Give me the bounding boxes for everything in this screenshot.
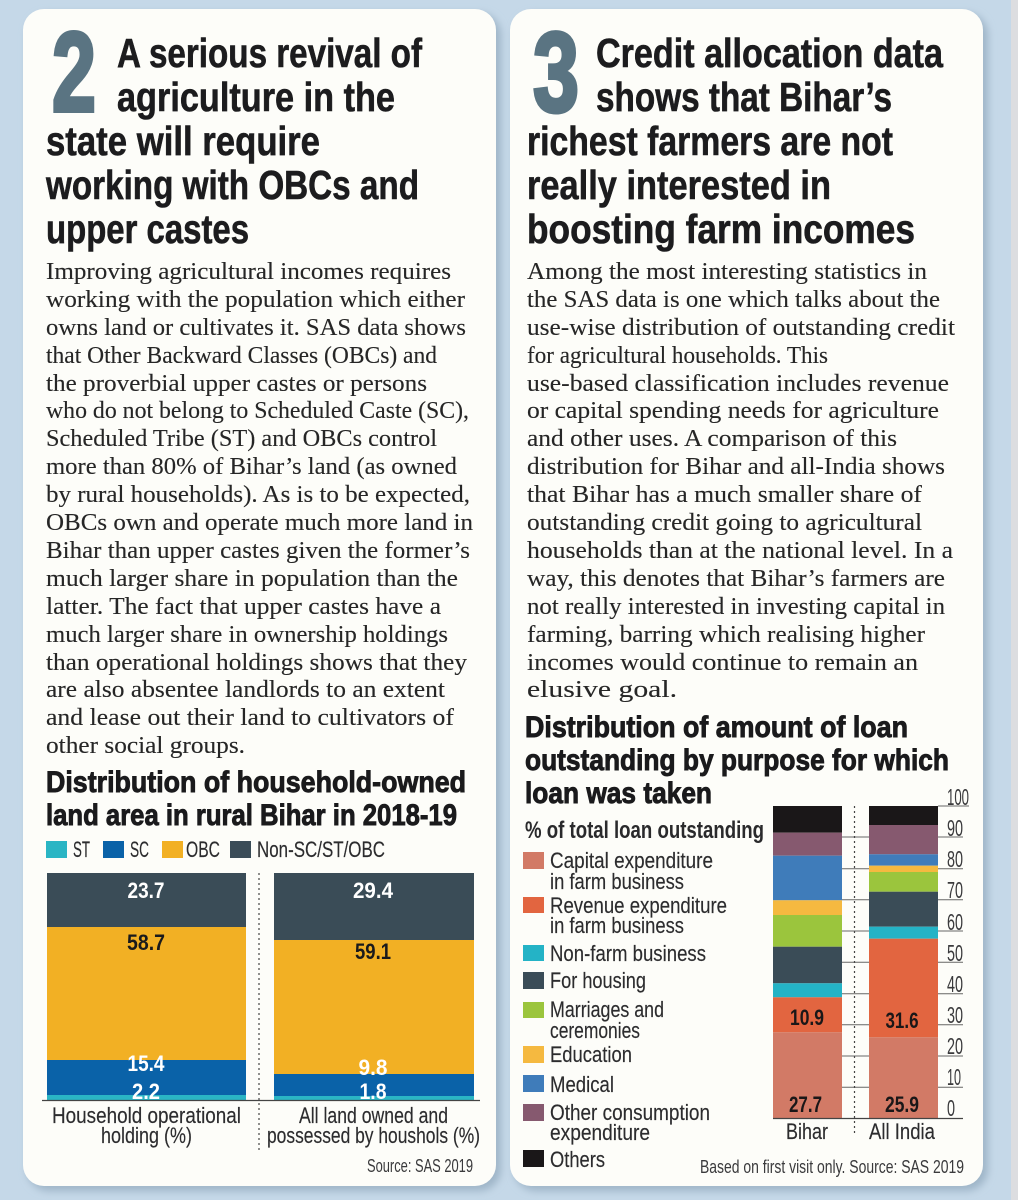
gridlines and axis ticks (842, 806, 969, 1087)
heading: left panel: state will require (46, 118, 320, 164)
source note: left panel: Source: SAS 2019 (367, 1156, 473, 1176)
legend: loan chart: Revenue expenditure (550, 893, 727, 918)
body text: left panel: by rural households). As is to be expected, (46, 482, 470, 508)
bar: household operational holding: 15.4 (128, 1051, 165, 1076)
body text: right panel: distribution for Bihar and all-India shows (527, 454, 945, 480)
legend: loan chart (523, 848, 727, 1172)
legend: loan chart: ceremonies (550, 1018, 640, 1043)
y axis labels: 90 (947, 815, 963, 841)
bar: All India: 31.6 (886, 1008, 918, 1033)
body text: right panel: incomes would continue to remain an (527, 650, 918, 676)
chart title: loan outstanding: outstanding by purpose for which (525, 744, 949, 777)
big numeral 3: 3 (533, 9, 579, 135)
bar: household operational holding: 23.7 (128, 878, 164, 903)
body text: right panel: use-based classification includes revenue (527, 371, 949, 397)
stacked bar chart: land distribution (42, 873, 480, 1150)
chart title: household-owned land: Distribution of household-owned (46, 766, 466, 799)
bar: household operational holding: 58.7 (127, 930, 165, 955)
y axis labels: 100 (947, 784, 969, 810)
body text: left panel: the proverbial upper castes or persons (46, 371, 427, 397)
heading: right panel: shows that Bihar’s (596, 74, 892, 120)
stacked bar chart: loan purpose (773, 784, 969, 1144)
heading: right panel: richest farmers are not (527, 118, 893, 164)
bar: Bihar: 10.9 (790, 1005, 824, 1030)
body text: right panel: use-wise distribution of outstanding credit (527, 315, 955, 341)
bar: all land owned: 59.1 (355, 939, 391, 964)
heading: right panel (527, 30, 944, 252)
body text: left panel: owns land or cultivates it. SAS data shows (46, 315, 466, 341)
body text: left panel: Bihar than upper castes given the former’s (46, 538, 470, 564)
body text: right panel: farming, barring which realising higher (527, 622, 925, 648)
y axis labels: 40 (947, 971, 963, 997)
bar: all land owned: 9.8 (358, 1055, 388, 1080)
body text: right panel: the SAS data is one which talks about the (527, 287, 940, 313)
y axis labels: 10 (947, 1064, 961, 1090)
bar: Bihar: 27.7 (789, 1092, 822, 1117)
body text: left panel: working with the population which either (46, 287, 465, 313)
y axis labels (947, 784, 969, 1121)
axis labels: Household operational (52, 1103, 241, 1128)
x axis labels: All India (869, 1119, 936, 1144)
chart title: household-owned land: land area in rural Bihar in 2018-19 (46, 799, 457, 832)
y axis labels: 70 (947, 877, 963, 903)
legend: loan chart: Medical (550, 1072, 614, 1097)
body text: left panel: than operational holdings shows that they (46, 650, 467, 676)
y axis labels: 80 (947, 846, 963, 872)
axis labels: holding (%) (101, 1123, 192, 1148)
body text: left panel: much larger share in ownership holdings (46, 622, 448, 648)
body text: left panel: more than 80% of Bihar’s land (as owned (46, 454, 457, 480)
legend: land chart (46, 837, 385, 862)
body text: right panel: and other uses. A comparison of this (527, 426, 897, 452)
body text: left panel (46, 259, 473, 759)
heading: left panel: A serious revival of (117, 30, 422, 76)
legend: land chart: ST (73, 837, 90, 862)
legend: loan chart: in farm business (550, 913, 684, 938)
legend: loan chart: Non-farm business (550, 941, 706, 966)
legend: loan chart: For housing (550, 968, 646, 993)
bar: all land owned: 29.4 (353, 878, 394, 903)
legend: land chart: Non-SC/ST/OBC (257, 837, 385, 862)
bar: All India: 25.9 (885, 1092, 919, 1117)
body text: right panel: outstanding credit going to agricultural (527, 510, 922, 536)
chart title: household-owned land (46, 766, 466, 832)
axis labels (52, 1103, 480, 1148)
chart title: loan outstanding: loan was taken (525, 777, 712, 810)
legend: loan chart: expenditure (550, 1120, 650, 1145)
heading: left panel: agriculture in the (117, 74, 395, 120)
axis labels: possessed by houshols (%) (267, 1123, 480, 1148)
body text: right panel: for agricultural households. This (527, 343, 828, 369)
y axis labels: 60 (947, 909, 963, 935)
heading: right panel: Credit allocation data (596, 30, 944, 76)
bar: All India (869, 806, 938, 1118)
panel: left, revival of agriculture (23, 9, 501, 1191)
body text: left panel: who do not belong to Scheduled Caste (SC), (46, 398, 469, 424)
heading: right panel: really interested in (527, 162, 831, 208)
legend: loan chart: Others (550, 1147, 605, 1172)
body text: right panel (527, 259, 955, 703)
y axis labels: 50 (947, 940, 963, 966)
heading: left panel (45, 30, 422, 252)
body text: left panel: much larger share in population than the (46, 566, 458, 592)
chart title: loan outstanding (525, 711, 949, 810)
body text: right panel: way, this denotes that Bihar’s farmers are (527, 566, 945, 592)
bar: all land owned: 1.8 (360, 1079, 386, 1104)
body text: left panel: Scheduled Tribe (ST) and OBCs control (46, 426, 437, 452)
axis labels: All land owned and (299, 1103, 448, 1128)
chart subtitle: % of total loan outstanding (525, 817, 764, 844)
body text: left panel: and lease out their land to cultivators of (46, 705, 454, 731)
legend: loan chart: Capital expenditure (550, 848, 713, 873)
heading: left panel: upper castes (46, 206, 249, 252)
panel: right, credit allocation (510, 9, 988, 1191)
bar: all land owned (274, 873, 474, 1104)
heading: left panel: working with OBCs and (45, 162, 419, 208)
body text: right panel: households than at the national level. In a (527, 538, 953, 564)
legend: loan chart: Education (550, 1042, 632, 1067)
x axis labels (786, 1119, 936, 1144)
legend: land chart: SC (130, 837, 149, 862)
legend: land chart: OBC (186, 837, 220, 862)
body text: right panel: or capital spending needs for agriculture (527, 398, 939, 424)
body text: left panel: are also absentee landlords to an extent (46, 677, 445, 703)
chart title: loan outstanding: Distribution of amount of loan (525, 711, 908, 744)
body text: right panel: not really interested in investing capital in (527, 594, 945, 620)
body text: left panel: other social groups. (46, 733, 245, 759)
body text: right panel: elusive goal. (527, 677, 677, 703)
legend: loan chart: in farm business (550, 869, 684, 894)
big numeral 2: 2 (52, 9, 96, 135)
body text: left panel: Improving agricultural incomes requires (46, 259, 451, 285)
body text: right panel: Among the most interesting statistics in (527, 259, 927, 285)
legend: loan chart: Other consumption (550, 1100, 710, 1125)
bar: household operational holding: 2.2 (132, 1079, 160, 1104)
bar: Bihar (773, 806, 842, 1118)
body text: right panel: that Bihar has a much smaller share of (527, 482, 922, 508)
body text: left panel: latter. The fact that upper castes have a (46, 594, 441, 620)
bar: household operational holding (47, 873, 246, 1104)
heading: right panel: boosting farm incomes (527, 206, 915, 252)
legend: loan chart: Marriages and (550, 997, 664, 1022)
body text: left panel: OBCs own and operate much more land in (46, 510, 473, 536)
x axis labels: Bihar (786, 1119, 828, 1144)
y axis labels: 0 (947, 1095, 955, 1121)
y axis labels: 30 (947, 1002, 963, 1028)
y axis labels: 20 (947, 1033, 963, 1059)
body text: left panel: that Other Backward Classes (OBCs) and (46, 343, 437, 369)
